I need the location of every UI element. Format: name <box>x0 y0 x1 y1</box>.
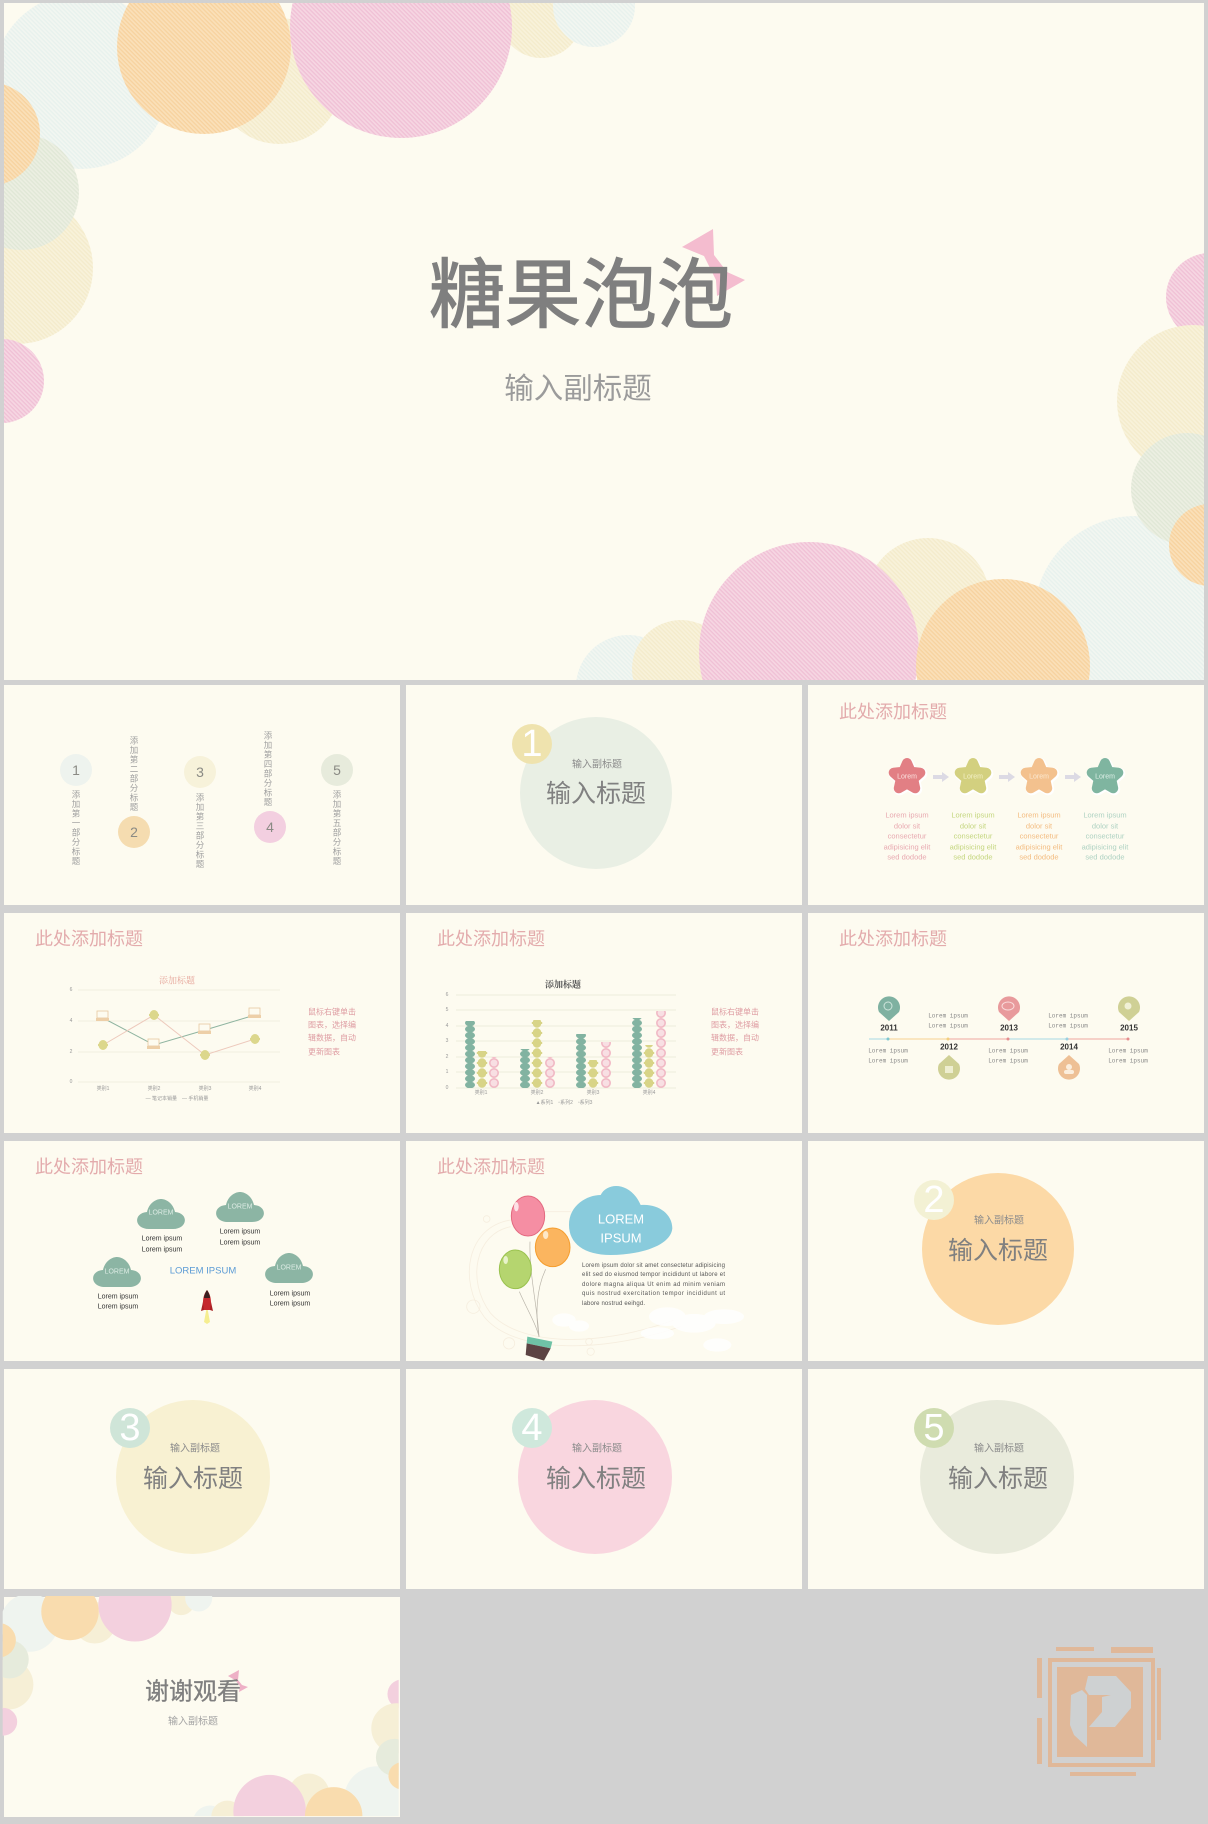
timeline captions: Lorem ipsum <box>928 1022 968 1030</box>
panel: contents slide <box>4 685 400 905</box>
speech cloud: LOREM <box>598 1212 644 1226</box>
panel: pictogram bar chart slide: 此处添加标题 <box>437 929 545 949</box>
panel: section 3 slide: 输入标题 <box>143 1465 243 1493</box>
panel: section 1 slide: 1 <box>521 723 543 765</box>
cloud 1: LOREM <box>149 1210 174 1216</box>
step text 3: consectetur <box>1020 832 1059 840</box>
bar chart: 1 <box>446 1069 449 1075</box>
timeline captions: Lorem ipsum <box>868 1058 908 1064</box>
step text 3 <box>1016 810 1063 862</box>
cloud 3: Lorem ipsum <box>98 1294 138 1300</box>
timeline captions: Lorem ipsum <box>868 1048 908 1054</box>
item 3 <box>184 756 216 869</box>
item 2: 2 <box>130 824 138 840</box>
item 5 <box>321 754 353 866</box>
cloud 3 <box>93 1257 141 1310</box>
step text 3: adipisicing elit <box>1016 842 1063 852</box>
item 3: 添加第三部分标题 <box>195 793 205 869</box>
bar chart: 3 <box>446 1038 449 1044</box>
panel: section 1 slide <box>406 685 802 905</box>
body text: labore nostrud eeihgd. <box>582 1301 645 1307</box>
timeline captions: Lorem ipsum <box>928 1012 968 1020</box>
pin 2013 <box>998 996 1020 1032</box>
line chart: 类别3 <box>199 1085 212 1092</box>
step text 4: sed dodode <box>1085 852 1125 862</box>
bar chart: 类别3 <box>587 1089 600 1096</box>
item 1 <box>60 754 92 866</box>
bar chart: 类别1 <box>475 1089 488 1096</box>
panel: timeline slide: 此处添加标题 <box>839 929 947 949</box>
step text 1: adipisicing elit <box>884 842 931 852</box>
line chart: 类别4 <box>249 1085 262 1092</box>
cloud 1: Lorem ipsum <box>142 1246 182 1254</box>
side note: 更新图表 <box>711 1046 743 1056</box>
panel: star process slide: 此处添加标题 <box>839 702 947 722</box>
panel: section 4 slide: 输入标题 <box>546 1465 646 1493</box>
line chart: 类别1 <box>97 1085 110 1092</box>
timeline captions: Lorem ipsum <box>988 1058 1028 1064</box>
step text 1: sed dodode <box>887 852 927 862</box>
step text 2: Lorem ipsum <box>951 810 995 820</box>
panel: clouds slide: 此处添加标题 <box>35 1157 143 1177</box>
pin 2012 <box>938 1042 960 1080</box>
bar chart <box>446 978 676 1106</box>
body text: elit sed do eiusmod tempor incididunt ut labore et <box>582 1272 725 1278</box>
panel: section 1 slide: 输入副标题 <box>572 758 622 770</box>
cloud 2: Lorem ipsum <box>220 1228 260 1236</box>
cloud 2: LOREM <box>228 1204 253 1210</box>
android markers <box>98 1010 260 1060</box>
item 2 <box>118 736 150 848</box>
panel: section 4 slide <box>406 1369 802 1589</box>
pin 2015 <box>1118 996 1140 1032</box>
cloud 3: Lorem ipsum <box>98 1304 138 1310</box>
bar chart: 类别2 <box>531 1089 544 1096</box>
panel: star process slide <box>808 685 1204 905</box>
step text 3: Lorem ipsum <box>1017 810 1061 820</box>
panel: section 3 slide: 3 <box>119 1407 141 1449</box>
panel: section 2 slide: 2 <box>923 1179 945 1221</box>
step text 2: dolor sit <box>960 822 987 830</box>
star step 1 <box>894 763 921 789</box>
step text 2 <box>950 810 997 862</box>
star step 3 <box>1026 763 1053 789</box>
pin 2014: 2014 <box>1060 1042 1078 1052</box>
timeline captions: Lorem ipsum <box>1048 1022 1088 1030</box>
cloud 2: Lorem ipsum <box>220 1240 260 1246</box>
panel: balloons slide <box>406 1141 802 1361</box>
item 2: 添加第二部分标题 <box>129 736 139 812</box>
timeline captions: Lorem ipsum <box>988 1048 1028 1054</box>
panel: section 5 slide <box>808 1369 1204 1589</box>
timeline axis <box>869 1038 1130 1040</box>
bar chart: 类别4 <box>643 1089 656 1096</box>
step text 1: Lorem ipsum <box>885 810 929 820</box>
step text 1 <box>884 810 931 862</box>
panel: section 3 slide: 输入副标题 <box>170 1442 220 1454</box>
bar chart: 0 <box>446 1085 449 1091</box>
side note: 图表，选择编 <box>711 1020 759 1030</box>
pin 2011: 2011 <box>880 1024 898 1032</box>
icon: rocket <box>201 1290 213 1324</box>
bubble decorations <box>2 1596 399 1816</box>
step text 3: dolor sit <box>1026 822 1053 830</box>
panel: pictogram bar chart slide <box>406 913 802 1133</box>
panel: section 2 slide <box>808 1141 1204 1361</box>
panel: thank-you slide <box>2 1596 400 1817</box>
panel: timeline slide <box>808 913 1204 1133</box>
closing subtitle: 输入副标题 <box>168 1714 218 1728</box>
star step 2: Lorem <box>963 774 983 780</box>
centre label: LOREM IPSUM <box>170 1266 236 1276</box>
pin 2014 <box>1058 1042 1080 1080</box>
side note: 更新图表 <box>308 1046 340 1056</box>
chart legend: — 笔记本销量 — 手机销量 <box>146 1095 208 1102</box>
panel: section 2 slide: 输入标题 <box>948 1237 1048 1265</box>
timeline captions <box>868 1012 1148 1064</box>
side note <box>711 1006 759 1056</box>
arrow 1 <box>933 772 949 782</box>
side note: 辑数据，自动 <box>308 1032 356 1042</box>
step text 4: consectetur <box>1086 832 1125 840</box>
body text: dolore magna aliqua Ut enim ad minim veniam <box>582 1282 725 1288</box>
pin 2013: 2013 <box>1000 1024 1018 1032</box>
bar chart: 5 <box>446 1007 449 1013</box>
icon: pink bow <box>682 229 745 296</box>
panel: clouds slide <box>4 1141 400 1361</box>
item 5: 5 <box>333 762 341 778</box>
closing title: 谢谢观看 <box>145 1678 241 1706</box>
panel: section 5 slide: 5 <box>923 1407 945 1449</box>
line chart: 0 <box>70 1079 73 1085</box>
item 1: 1 <box>72 762 80 778</box>
side note: 图表，选择编 <box>308 1020 356 1030</box>
step text 2: sed dodode <box>953 852 993 862</box>
pin 2015: 2015 <box>1120 1024 1138 1032</box>
bar chart: 2 <box>446 1054 449 1060</box>
bar chart: 4 <box>446 1023 449 1029</box>
timeline captions: Lorem ipsum <box>1048 1012 1088 1020</box>
side note: 鼠标右键单击 <box>711 1006 759 1016</box>
step text 4 <box>1082 810 1129 862</box>
timeline captions: Lorem ipsum <box>1108 1058 1148 1064</box>
step text 2: consectetur <box>954 832 993 840</box>
balloons illustration <box>467 1196 744 1361</box>
side note <box>308 1006 356 1056</box>
main title: 糖果泡泡 <box>429 254 733 338</box>
line chart: 6 <box>70 987 73 993</box>
pin 2012: 2012 <box>940 1042 958 1052</box>
item 4: 添加第四部分标题 <box>263 731 273 807</box>
star step 4 <box>1092 763 1119 789</box>
panel: section 5 slide: 输入副标题 <box>974 1442 1024 1454</box>
balloon orange <box>535 1228 570 1267</box>
panel: section 4 slide: 4 <box>521 1407 543 1449</box>
line chart: 添加标题 <box>159 974 195 986</box>
timeline captions: Lorem ipsum <box>1108 1048 1148 1054</box>
pin 2011 <box>878 996 900 1032</box>
side note: 鼠标右键单击 <box>308 1006 356 1016</box>
gift box <box>526 1337 552 1361</box>
side note: 辑数据，自动 <box>711 1032 759 1042</box>
speech cloud <box>569 1186 672 1255</box>
step text 2: adipisicing elit <box>950 842 997 852</box>
step text 1: dolor sit <box>894 822 921 830</box>
cloud 1: Lorem ipsum <box>142 1236 182 1242</box>
star step 2 <box>960 763 987 789</box>
panel: line chart slide: 此处添加标题 <box>35 929 143 949</box>
star step 1: Lorem <box>897 774 917 780</box>
item 3: 3 <box>196 764 204 780</box>
cloud 4: Lorem ipsum <box>270 1290 310 1298</box>
panel: section 1 slide: 输入标题 <box>546 780 646 808</box>
star step 3: Lorem <box>1029 774 1049 780</box>
line chart: 2 <box>70 1049 73 1055</box>
notebook markers <box>97 1008 260 1046</box>
chart legend: ▲系列1 ▫系列2 ▫系列3 <box>536 1099 593 1106</box>
arrow 2 <box>999 772 1015 782</box>
cloud 2 <box>216 1192 264 1246</box>
panel: balloons slide: 此处添加标题 <box>437 1157 545 1177</box>
panel: line chart slide <box>4 913 400 1133</box>
star step 4: Lorem <box>1095 774 1115 780</box>
item 5: 添加第五部分标题 <box>332 790 342 866</box>
icon: pink bow <box>228 1670 248 1692</box>
cloud 4 <box>265 1253 313 1308</box>
step text 3: sed dodode <box>1019 852 1059 862</box>
step text 4: adipisicing elit <box>1082 842 1129 852</box>
panel: title slide <box>4 3 1204 680</box>
body text: quis nostrud exercitation tempor incididunt ut <box>582 1291 725 1297</box>
line chart: 类别2 <box>148 1085 161 1092</box>
bar chart: 6 <box>446 992 449 998</box>
panel: section 2 slide: 输入副标题 <box>974 1214 1024 1226</box>
cloud 3: LOREM <box>105 1268 130 1276</box>
panel: section 4 slide: 输入副标题 <box>572 1442 622 1454</box>
line chart <box>70 974 280 1102</box>
bubble decorations <box>4 3 1204 680</box>
balloon green <box>499 1250 531 1289</box>
panel: section 5 slide: 输入标题 <box>948 1465 1048 1493</box>
speech cloud: IPSUM <box>600 1230 642 1246</box>
item 4 <box>254 731 286 843</box>
panel: section 3 slide <box>4 1369 400 1589</box>
body text <box>582 1263 725 1307</box>
item 4: 4 <box>266 819 274 835</box>
arrow 3 <box>1065 772 1081 782</box>
line chart: 4 <box>70 1018 73 1024</box>
balloon pink <box>511 1196 545 1236</box>
bar chart: 添加标题 <box>545 978 581 990</box>
body text: Lorem ipsum dolor sit amet consectetur adipisicing <box>582 1263 725 1269</box>
cloud 1 <box>137 1199 185 1254</box>
subtitle: 输入副标题 <box>504 372 652 406</box>
icon: P stamp watermark <box>1037 1647 1161 1776</box>
step text 1: consectetur <box>888 832 927 840</box>
cloud 4: LOREM <box>277 1264 302 1272</box>
step text 4: dolor sit <box>1092 822 1119 830</box>
step text 4: Lorem ipsum <box>1083 810 1127 820</box>
item 1: 添加第一部分标题 <box>71 790 81 866</box>
cloud 4: Lorem ipsum <box>270 1300 310 1308</box>
